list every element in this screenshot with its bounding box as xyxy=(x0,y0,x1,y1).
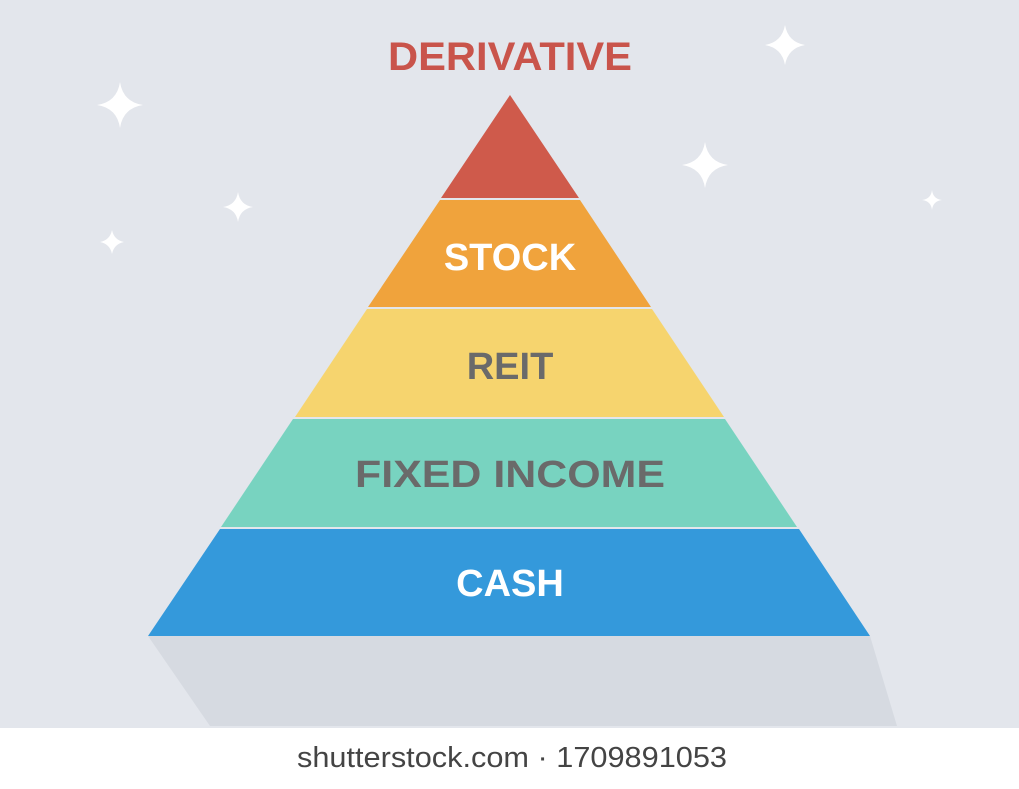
pyramid shadow xyxy=(148,636,897,726)
tier: fixed income: FIXED INCOME xyxy=(355,454,665,496)
tier: stock xyxy=(368,200,651,307)
title: DERIVATIVE: DERIVATIVE xyxy=(388,35,632,79)
tier: stock: STOCK xyxy=(444,237,577,279)
pyramid xyxy=(148,95,870,636)
tier: cash: CASH xyxy=(456,563,564,605)
watermark footer: shutterstock.com · 1709891053 xyxy=(297,742,727,774)
stars xyxy=(97,25,942,254)
tier: cash xyxy=(148,529,870,636)
tier: derivative xyxy=(441,95,579,198)
tier: reit: REIT xyxy=(467,346,553,388)
tier: fixed income xyxy=(221,419,797,527)
tier: reit xyxy=(295,309,724,417)
